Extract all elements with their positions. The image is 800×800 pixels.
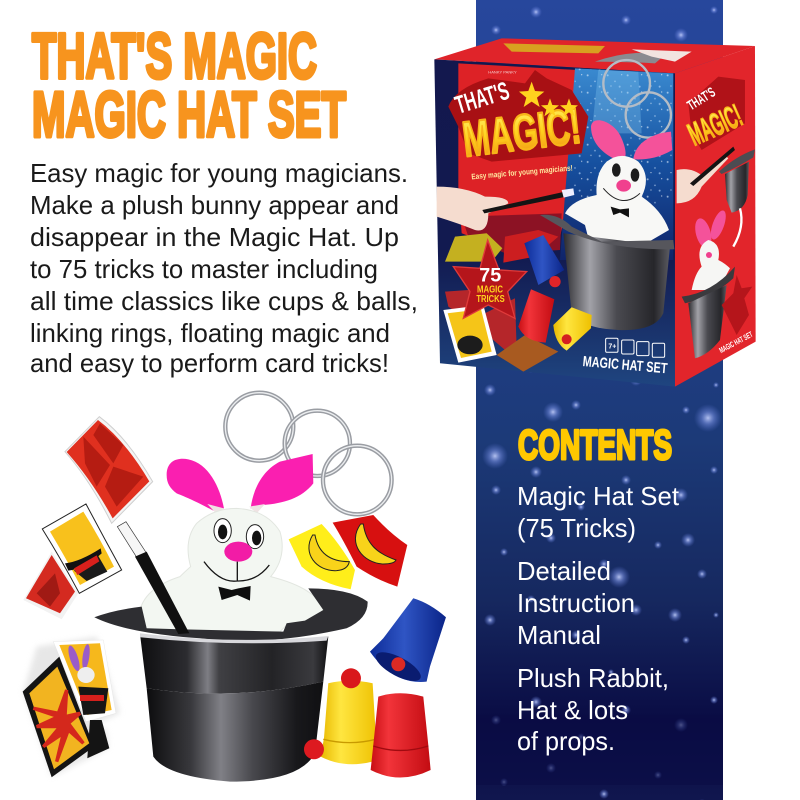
- description text: Easy magic for young magicians.: [30, 158, 408, 188]
- title: MAGIC HAT SET: [32, 78, 346, 150]
- linking rings: [225, 393, 392, 514]
- 75 magic tricks star badge: [453, 240, 527, 318]
- box side face: MAGIC HAT SET: [718, 330, 754, 355]
- description text: Make a plush bunny appear and: [30, 190, 399, 220]
- description text: linking rings, floating magic and: [30, 318, 390, 348]
- contents list: Hat & lots: [517, 695, 628, 725]
- contents list: Manual: [517, 620, 601, 650]
- front top hat: [540, 215, 674, 330]
- front cards: [443, 290, 558, 372]
- box top face: [434, 38, 755, 73]
- age label: 7+: [608, 343, 616, 350]
- red patterned card lower: [23, 552, 78, 619]
- description text: disappear in the Magic Hat. Up: [30, 222, 399, 252]
- logo: That's Magic: THAT'S: [452, 77, 513, 120]
- contents list: of props.: [517, 726, 615, 756]
- 75 magic tricks star badge: 75: [479, 266, 502, 287]
- front red cup: [518, 289, 554, 343]
- front sparkle panel: [560, 60, 673, 260]
- contents list: Magic Hat Set: [517, 481, 680, 511]
- brand mark: HANKY PANKY: [488, 70, 517, 74]
- description text: to 75 tricks to master including: [30, 254, 378, 284]
- contents list: Instruction: [517, 588, 635, 618]
- box side face: THAT'S: [684, 84, 718, 113]
- contents list: Detailed: [517, 556, 611, 586]
- age and icons row: [606, 338, 665, 357]
- top hat: [94, 588, 368, 782]
- box front face: [434, 59, 675, 387]
- product box: [434, 38, 756, 387]
- contents list: [517, 481, 680, 756]
- plush rabbit: [139, 454, 323, 637]
- magic wand: [117, 522, 189, 634]
- logo: That's Magic: Easy magic for young magicians!: [471, 163, 573, 181]
- product name on box: MAGIC HAT SET: [582, 354, 668, 377]
- box top artwork: [503, 43, 692, 63]
- panel: starry blue contents band: [476, 0, 723, 800]
- front banana cards: [445, 230, 558, 263]
- front rabbit: [565, 120, 672, 244]
- description text: [30, 158, 418, 378]
- yellow cup: [321, 668, 378, 764]
- contents list: Plush Rabbit,: [517, 663, 669, 693]
- red cup: [371, 693, 431, 777]
- blue cup: [370, 598, 446, 687]
- 75 magic tricks star badge: TRICKS: [476, 294, 505, 305]
- front red panel: [458, 63, 577, 250]
- description text: and easy to perform card tricks!: [30, 348, 389, 378]
- 75 magic tricks star badge: MAGIC: [477, 285, 503, 296]
- contents list: (75 Tricks): [517, 513, 636, 543]
- hat picture card: [42, 504, 122, 593]
- box side face: [675, 46, 756, 387]
- contents heading: CONTENTS: [518, 421, 672, 468]
- description text: all time classics like cups & balls,: [30, 286, 418, 316]
- banana card yellow: [289, 524, 355, 589]
- rabbit card with swirl card: [23, 637, 120, 777]
- banana card red: [333, 515, 407, 587]
- title: [32, 20, 346, 150]
- front yellow cup: [553, 307, 592, 351]
- front blue cup: [524, 235, 564, 287]
- red ball: [304, 739, 324, 759]
- red patterned card top: [65, 417, 153, 523]
- hand and wand: [437, 187, 574, 230]
- product contents illustration: [23, 393, 446, 782]
- logo: That's Magic: [448, 70, 588, 181]
- logo: That's Magic: MAGIC!: [460, 98, 584, 168]
- title: THAT'S MAGIC: [32, 20, 317, 92]
